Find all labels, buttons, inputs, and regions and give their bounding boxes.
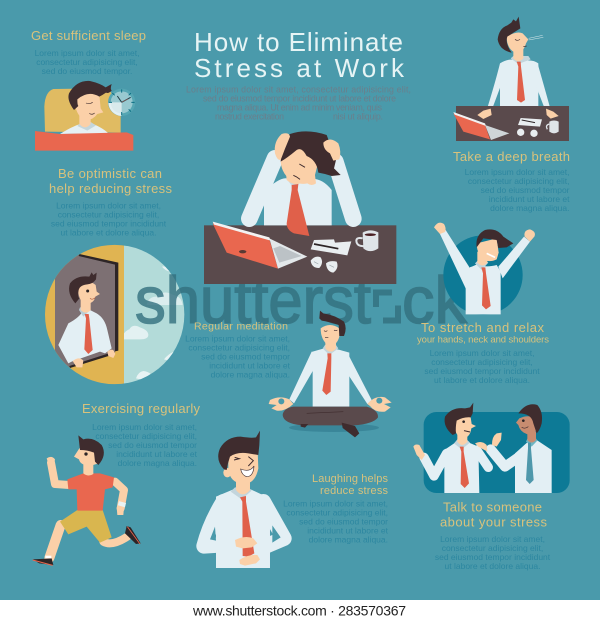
- heading: meditation: Regular meditation: [194, 320, 288, 332]
- panel: talk to someone: [413, 403, 570, 571]
- text: optimistic: consectetur adipisicing elit,: [58, 210, 159, 220]
- icon: two men talking: [413, 403, 570, 493]
- watermark: shutterst: [135, 263, 371, 337]
- text: meditation: consectetur adipisicing elit,: [188, 342, 290, 352]
- text: exercising: incididunt ut labore et: [116, 449, 198, 459]
- subheading: stretch: your hands, neck and shoulders: [417, 334, 549, 346]
- panel: take a deep breath: [453, 17, 570, 213]
- text: talk: ut labore et dolore aliqua.: [445, 561, 540, 571]
- text: laughing: sed do eiusmod tempor: [299, 516, 388, 526]
- footer credit: www.shutterstock.com · 283570367: [192, 602, 406, 618]
- intro text: nisi ut aliquip.: [333, 112, 383, 122]
- text: meditation: incididunt ut labore et: [209, 360, 291, 370]
- text: laughing: consectetur adipisicing elit,: [286, 508, 388, 518]
- heading: exercising: Exercising regularly: [82, 401, 200, 416]
- icon: stressed man: [249, 131, 353, 236]
- watermark: ck: [402, 263, 468, 337]
- text: optimistic: [51, 200, 167, 238]
- text: meditation: [185, 334, 291, 380]
- text: stretch: consectetur adipisicing elit,: [431, 357, 533, 367]
- text: exercising: Lorem ipsum dolor sit amet,: [92, 422, 197, 432]
- text: sleep: consectetur adipisicing elit,: [36, 57, 138, 67]
- text: stretch: sed eiusmod tempor incididunt: [424, 366, 540, 376]
- text: exercising: [92, 422, 198, 468]
- heading: laughing: reduce stress: [320, 485, 388, 497]
- text: stretch: Lorem ipsum dolor sit amet,: [430, 348, 534, 358]
- heading: talk: [440, 500, 548, 530]
- icon: sleeping man: [35, 81, 135, 151]
- text: exercising: consectetur adipisicing elit,: [95, 431, 197, 441]
- intro text: sed do eiusmod tempor incididunt ut labore et dolore: [203, 94, 396, 104]
- heading: sleep: Get sufficient sleep: [31, 28, 146, 43]
- heading: deep breath: Take a deep breath: [453, 149, 570, 164]
- text: sleep: [35, 48, 139, 76]
- title: How to Eliminate: [194, 27, 403, 57]
- heading: optimistic: [49, 166, 172, 196]
- text: optimistic: ut labore et dolore aliqua.: [61, 228, 156, 238]
- text: deep breath: sed do eiusmod tempor: [481, 185, 570, 195]
- text: laughing: dolore magna aliqua.: [309, 534, 388, 544]
- text: meditation: sed do eiusmod tempor: [201, 352, 290, 362]
- text: laughing: incididunt ut labore et: [307, 526, 389, 536]
- icon: man breathing at desk: [453, 17, 569, 141]
- text: meditation: dolore magna aliqua.: [211, 370, 290, 380]
- text: deep breath: dolore magna aliqua.: [490, 203, 570, 213]
- intro text: [186, 84, 411, 122]
- heading: optimistic: Be optimistic can: [58, 166, 162, 181]
- panel: regular meditation: [185, 311, 392, 437]
- intro text: magna aliqua. Ut enim ad minim veniam, quis: [217, 102, 383, 112]
- panel: stretch and relax: [417, 223, 549, 385]
- icon: meditating man: [269, 311, 392, 437]
- heading: stretch: To stretch and relax: [421, 320, 544, 335]
- text: deep breath: consectetur adipisicing elit,: [468, 176, 570, 186]
- icon: man at open door in circle: [43, 243, 187, 387]
- text: sleep: sed do eiusmod tempor.: [42, 66, 132, 76]
- text: sleep: Lorem ipsum dolor sit amet,: [35, 48, 139, 58]
- icon: laughing man: [204, 431, 284, 568]
- text: talk: sed eiusmod tempor incididunt: [435, 552, 551, 562]
- panel: laughing: [204, 431, 389, 568]
- icon: man stretching: [434, 223, 535, 315]
- intro text: Lorem ipsum dolor sit amet, consectetur adipisicing elit,: [186, 84, 411, 94]
- text: talk: Lorem ipsum dolor sit amet,: [440, 534, 545, 544]
- text: exercising: dolore magna aliqua.: [118, 458, 197, 468]
- title: [194, 27, 405, 83]
- heading: optimistic: help reducing stress: [49, 181, 172, 196]
- text: deep breath: [465, 167, 570, 213]
- text: talk: consectetur adipisicing elit,: [442, 543, 543, 553]
- heading: talk: about your stress: [440, 514, 548, 530]
- icon: desk with laptop: [204, 222, 396, 284]
- text: talk: [435, 534, 551, 571]
- heading: laughing: [312, 473, 388, 497]
- text: stretch: [424, 348, 540, 385]
- text: optimistic: Lorem ipsum dolor sit amet,: [56, 200, 161, 210]
- panel: get sufficient sleep: [31, 28, 146, 151]
- text: laughing: [283, 498, 389, 544]
- text: deep breath: incididunt ut labore et: [489, 194, 570, 204]
- text: meditation: Lorem ipsum dolor sit amet,: [185, 334, 290, 344]
- text: deep breath: Lorem ipsum dolor sit amet,: [465, 167, 570, 177]
- heading: talk: Talk to someone: [443, 500, 542, 514]
- panel: be optimistic: [43, 166, 187, 387]
- panel: central stressed man at desk: [204, 131, 396, 284]
- text: laughing: Lorem ipsum dolor sit amet,: [283, 498, 388, 508]
- icon: running man: [33, 435, 141, 565]
- heading: laughing: Laughing helps: [312, 473, 388, 485]
- title: Stress at Work: [194, 53, 405, 83]
- panel: exercising regularly: [33, 401, 201, 565]
- intro text: nostrud exercitation: [215, 112, 284, 122]
- text: exercising: sed do eiusmod tempor: [108, 440, 197, 450]
- text: stretch: ut labore et dolore aliqua.: [434, 375, 530, 385]
- text: optimistic: sed eiusmod tempor incididunt: [51, 218, 167, 228]
